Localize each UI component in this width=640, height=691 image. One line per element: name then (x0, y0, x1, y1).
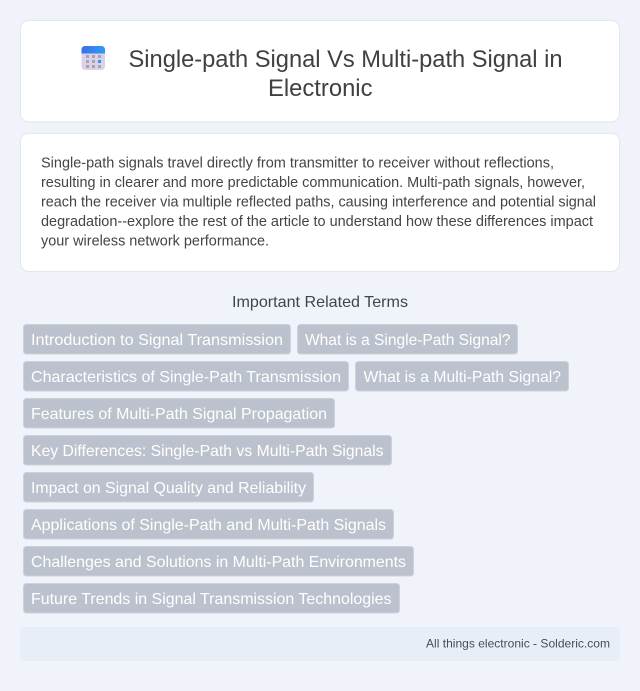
title (128, 46, 562, 102)
chip: single-path signal: What is a Single-Path Signal? (305, 332, 511, 349)
chip: introduction (24, 324, 290, 354)
footer (20, 627, 620, 661)
panel: related term chips (24, 324, 568, 613)
chip: key differences: Key Differences: Single-Path vs Multi-Path Signals (31, 443, 384, 460)
chip: features: Features of Multi-Path Signal Propagation (31, 406, 327, 423)
chip: characteristics (24, 362, 348, 391)
chip: introduction: Introduction to Signal Transmission (31, 332, 283, 349)
text block: summary paragraph: your wireless network performance. (41, 234, 269, 250)
chip: applications: Applications of Single-Path and Multi-Path Signals (31, 517, 386, 534)
icon: calendar (82, 46, 105, 70)
chip: single-path signal (298, 324, 518, 354)
text block: summary paragraph: resulting in clearer and more predictable communication. Multi-path signals, however, (41, 175, 585, 191)
chip: challenges (24, 546, 414, 576)
text block: summary paragraph: reach the receiver via multiple reflected paths, causing interference and potential signal (41, 194, 596, 210)
title: Single-path Signal Vs Multi-path Signal in (128, 46, 562, 73)
chip: features (24, 398, 334, 428)
panel: header card (20, 20, 620, 122)
title: Electronic (268, 75, 372, 102)
chip: impact: Impact on Signal Quality and Reliability (31, 480, 306, 497)
chip: key differences (24, 436, 392, 465)
text block: summary paragraph (41, 156, 596, 250)
chip: future trends: Future Trends in Signal Transmission Technologies (31, 591, 392, 608)
panel: summary card (20, 134, 620, 272)
chip: multi-path signal (356, 362, 568, 391)
footer: All things electronic - Solderic.com (426, 636, 610, 650)
text block: summary paragraph: degradation--explore the rest of the article to understand how these differences impact (41, 214, 593, 230)
chip: impact (24, 472, 314, 502)
heading: important related terms: Important Related Terms (232, 294, 408, 311)
chip: challenges: Challenges and Solutions in Multi-Path Environments (31, 554, 406, 571)
chip: future trends (24, 584, 400, 613)
chip: multi-path signal: What is a Multi-Path Signal? (364, 369, 561, 386)
chip: characteristics: Characteristics of Single-Path Transmission (31, 369, 341, 386)
chip: applications (24, 510, 394, 539)
text block: summary paragraph: Single-path signals travel directly from transmitter to receiver without reflections, (41, 156, 554, 172)
